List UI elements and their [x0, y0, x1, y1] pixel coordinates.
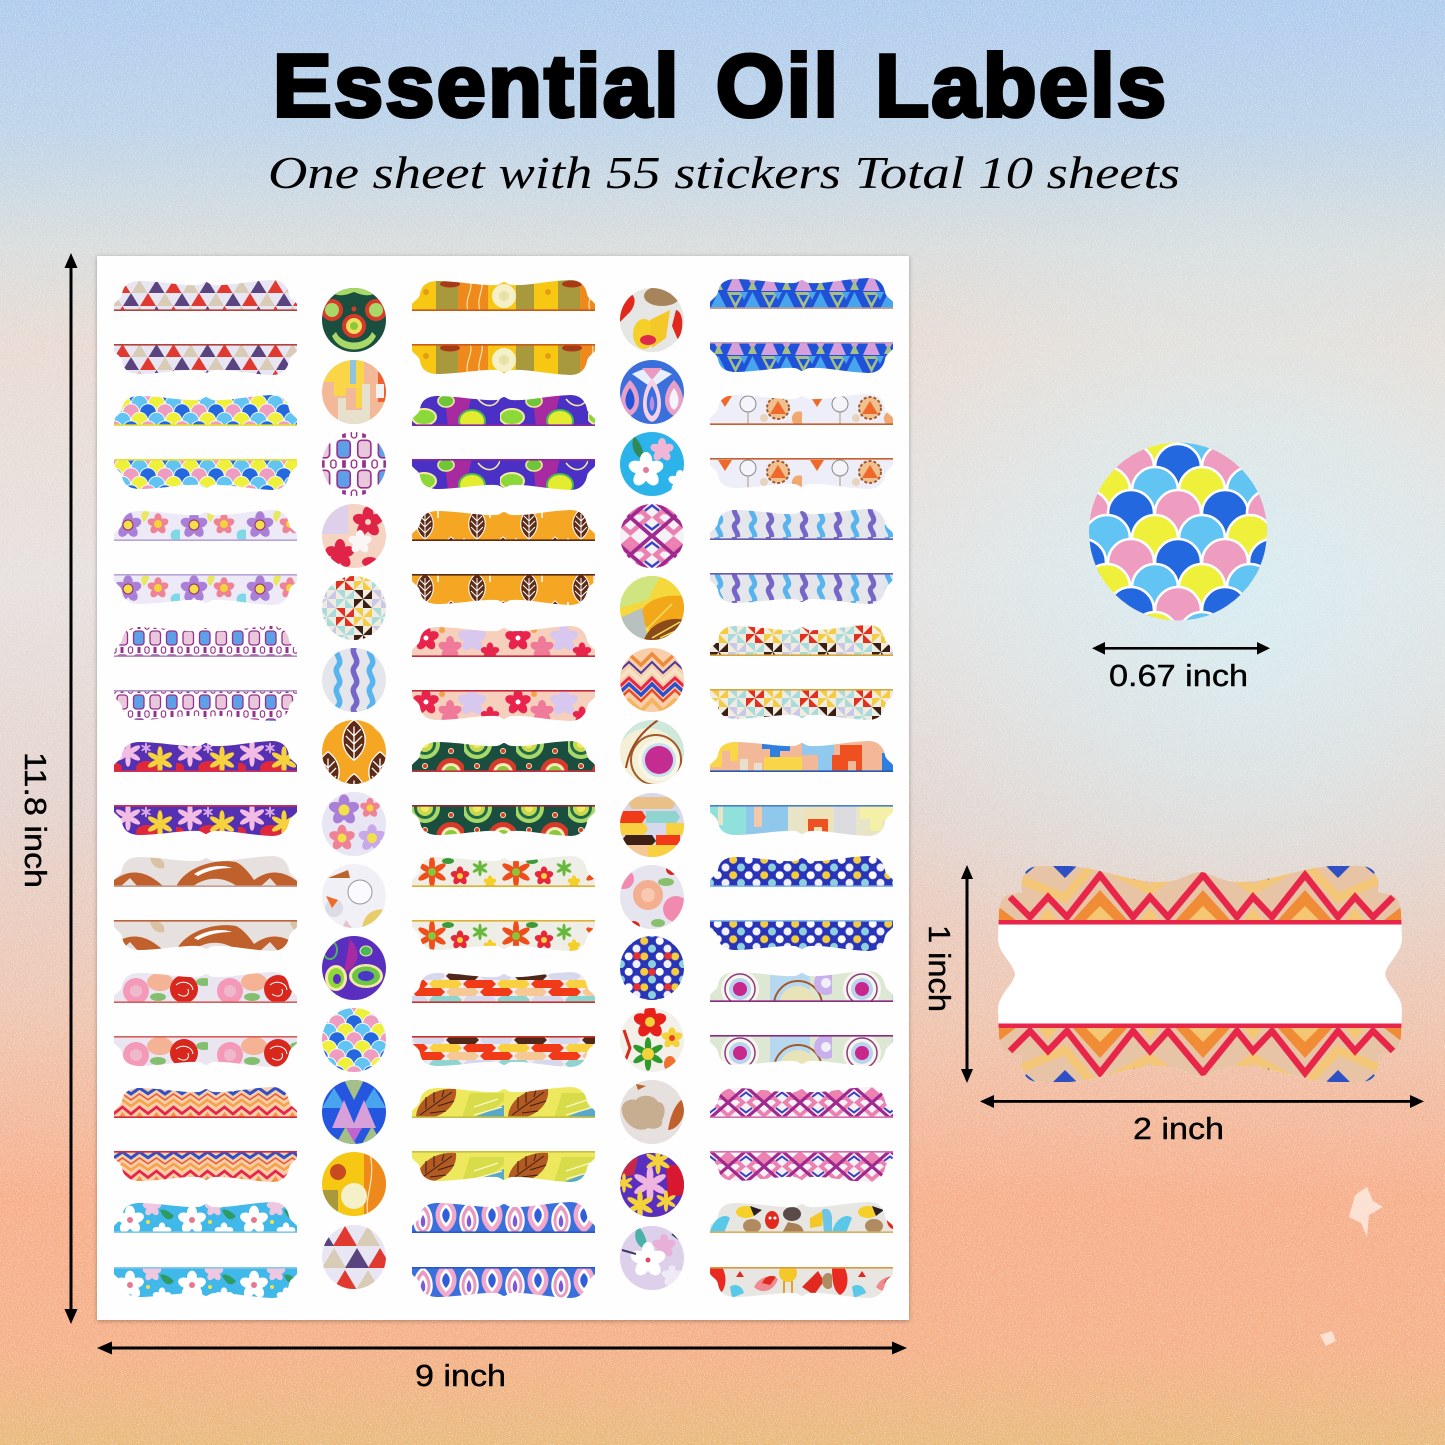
label: fish scales [114, 395, 297, 490]
arrow: label height [961, 865, 973, 1083]
round: bright flowers [620, 1005, 684, 1072]
column 1 of round stickers [322, 288, 386, 1289]
round: roses [620, 865, 684, 929]
arrow: sheet width [97, 1342, 907, 1354]
round: waves [322, 646, 386, 714]
round: chevrons [620, 648, 684, 712]
label: pink flowers [412, 626, 595, 721]
label: chevrons [114, 1087, 297, 1182]
label: blue arcs [412, 1202, 595, 1298]
round: purple blobs [322, 936, 386, 1000]
label: circles [710, 971, 893, 1066]
round: purple florals [620, 1153, 684, 1217]
round: lilac floral [620, 1226, 684, 1290]
label: orange leaves [412, 510, 595, 605]
label: lattice [114, 626, 297, 721]
column 1 of label stickers [114, 280, 297, 1298]
label: bright flowers [412, 856, 595, 951]
column 2 of label stickers [412, 280, 595, 1298]
round: blue triangles [322, 1080, 386, 1144]
column 2 of round stickers [620, 288, 684, 1290]
label: hexagons [412, 972, 595, 1067]
arrow: round sticker width [1092, 642, 1270, 655]
label: golden florals [412, 280, 595, 375]
dimension label: 9 inch: 9 inch [415, 1358, 506, 1393]
label: green retro [412, 741, 595, 836]
label: yellow leaves [412, 1087, 595, 1182]
round: drips [322, 360, 386, 424]
dimension label: 1 inch: 1 inch [922, 925, 957, 1012]
subtitle: One sheet with 55 stickers Total 10 sheets [268, 147, 1180, 198]
round: white floral [322, 864, 386, 928]
round: teardrops [620, 360, 684, 424]
arrow: label width [980, 1095, 1424, 1108]
round: white blue flower [620, 432, 684, 496]
dimension label: 0.67 inch: 0.67 inch [1109, 658, 1248, 693]
panel: sticker sheet [97, 256, 909, 1320]
title: Essential Oil Labels [273, 36, 1166, 135]
round: purple diamonds [620, 504, 684, 568]
label: waves [710, 509, 893, 604]
round: tan blob [620, 1080, 684, 1144]
label: pinwheels [710, 625, 893, 720]
label: blue flowers [114, 1202, 297, 1298]
label: roses [114, 972, 297, 1067]
round: rings [620, 720, 684, 784]
round: yellow leaves [620, 576, 684, 640]
column 3 of label stickers [710, 278, 893, 1298]
label: purple crosses [710, 1087, 893, 1182]
round: lattice [322, 432, 386, 496]
round: pinwheels [322, 576, 386, 640]
label: purple blobs [412, 395, 595, 490]
label: blue triangles [710, 278, 893, 373]
label: white florals [710, 394, 893, 489]
round: golden floral [322, 1152, 386, 1216]
round: fish scales [322, 1008, 386, 1072]
label sticker close-up [995, 862, 1405, 1086]
dimension label: 2 inch: 2 inch [1133, 1111, 1224, 1146]
label: yellow flowers on purple [114, 741, 297, 836]
arrow: sheet height [64, 253, 78, 1324]
label: purple flowers [114, 510, 297, 605]
round: hexagons [620, 793, 684, 857]
label: drips [710, 741, 893, 836]
round: polka dots [620, 936, 684, 1000]
round: lavender flowers [322, 792, 387, 856]
label: polka dots [710, 856, 893, 951]
round: birds [620, 286, 684, 352]
round sticker close-up [1089, 442, 1267, 620]
round: triangles [322, 1225, 386, 1289]
label: feathers [114, 856, 297, 951]
dimension label: 11.8 inch: 11.8 inch [18, 752, 53, 888]
label: triangles [114, 280, 297, 375]
label: birds [710, 1202, 893, 1298]
round: pink flowers [322, 504, 386, 569]
round: leaves [322, 720, 386, 784]
round: green retro [321, 288, 387, 352]
